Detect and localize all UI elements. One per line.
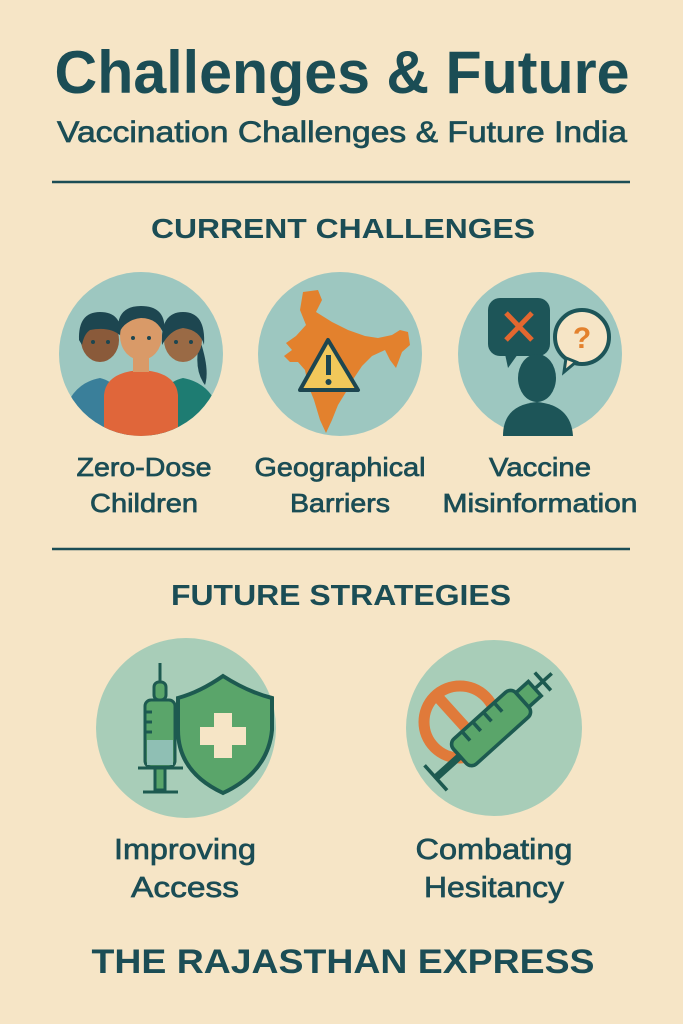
label: combating hesitancy: Combating: [416, 834, 572, 866]
label: vaccine misinformation: Misinformation: [442, 488, 638, 518]
heading: current challenges: CURRENT CHALLENGES: [151, 213, 535, 244]
icon: improving access: [96, 638, 276, 818]
label: vaccine misinformation: Vaccine: [489, 452, 591, 482]
label: zero-dose children: Zero-Dose: [76, 452, 212, 482]
icon: india map with warning: [258, 272, 422, 436]
title: Challenges & Future: [54, 39, 630, 106]
label: combating hesitancy: Hesitancy: [424, 872, 565, 904]
footer: THE RAJASTHAN EXPRESS: [92, 943, 594, 981]
label: geographical barriers: Barriers: [290, 488, 390, 518]
label: geographical barriers: Geographical: [254, 452, 426, 482]
icon: combating hesitancy: [406, 640, 582, 816]
icon: zero-dose children: [59, 272, 224, 440]
label: zero-dose children: Children: [90, 488, 198, 518]
subtitle: Vaccination Challenges & Future India: [57, 116, 627, 149]
label: improving access: Access: [131, 872, 239, 904]
label: improving access: Improving: [114, 834, 256, 866]
icon: misinformation: ?: [573, 322, 591, 355]
icon: misinformation: [458, 272, 622, 436]
heading: future strategies: FUTURE STRATEGIES: [171, 580, 511, 612]
